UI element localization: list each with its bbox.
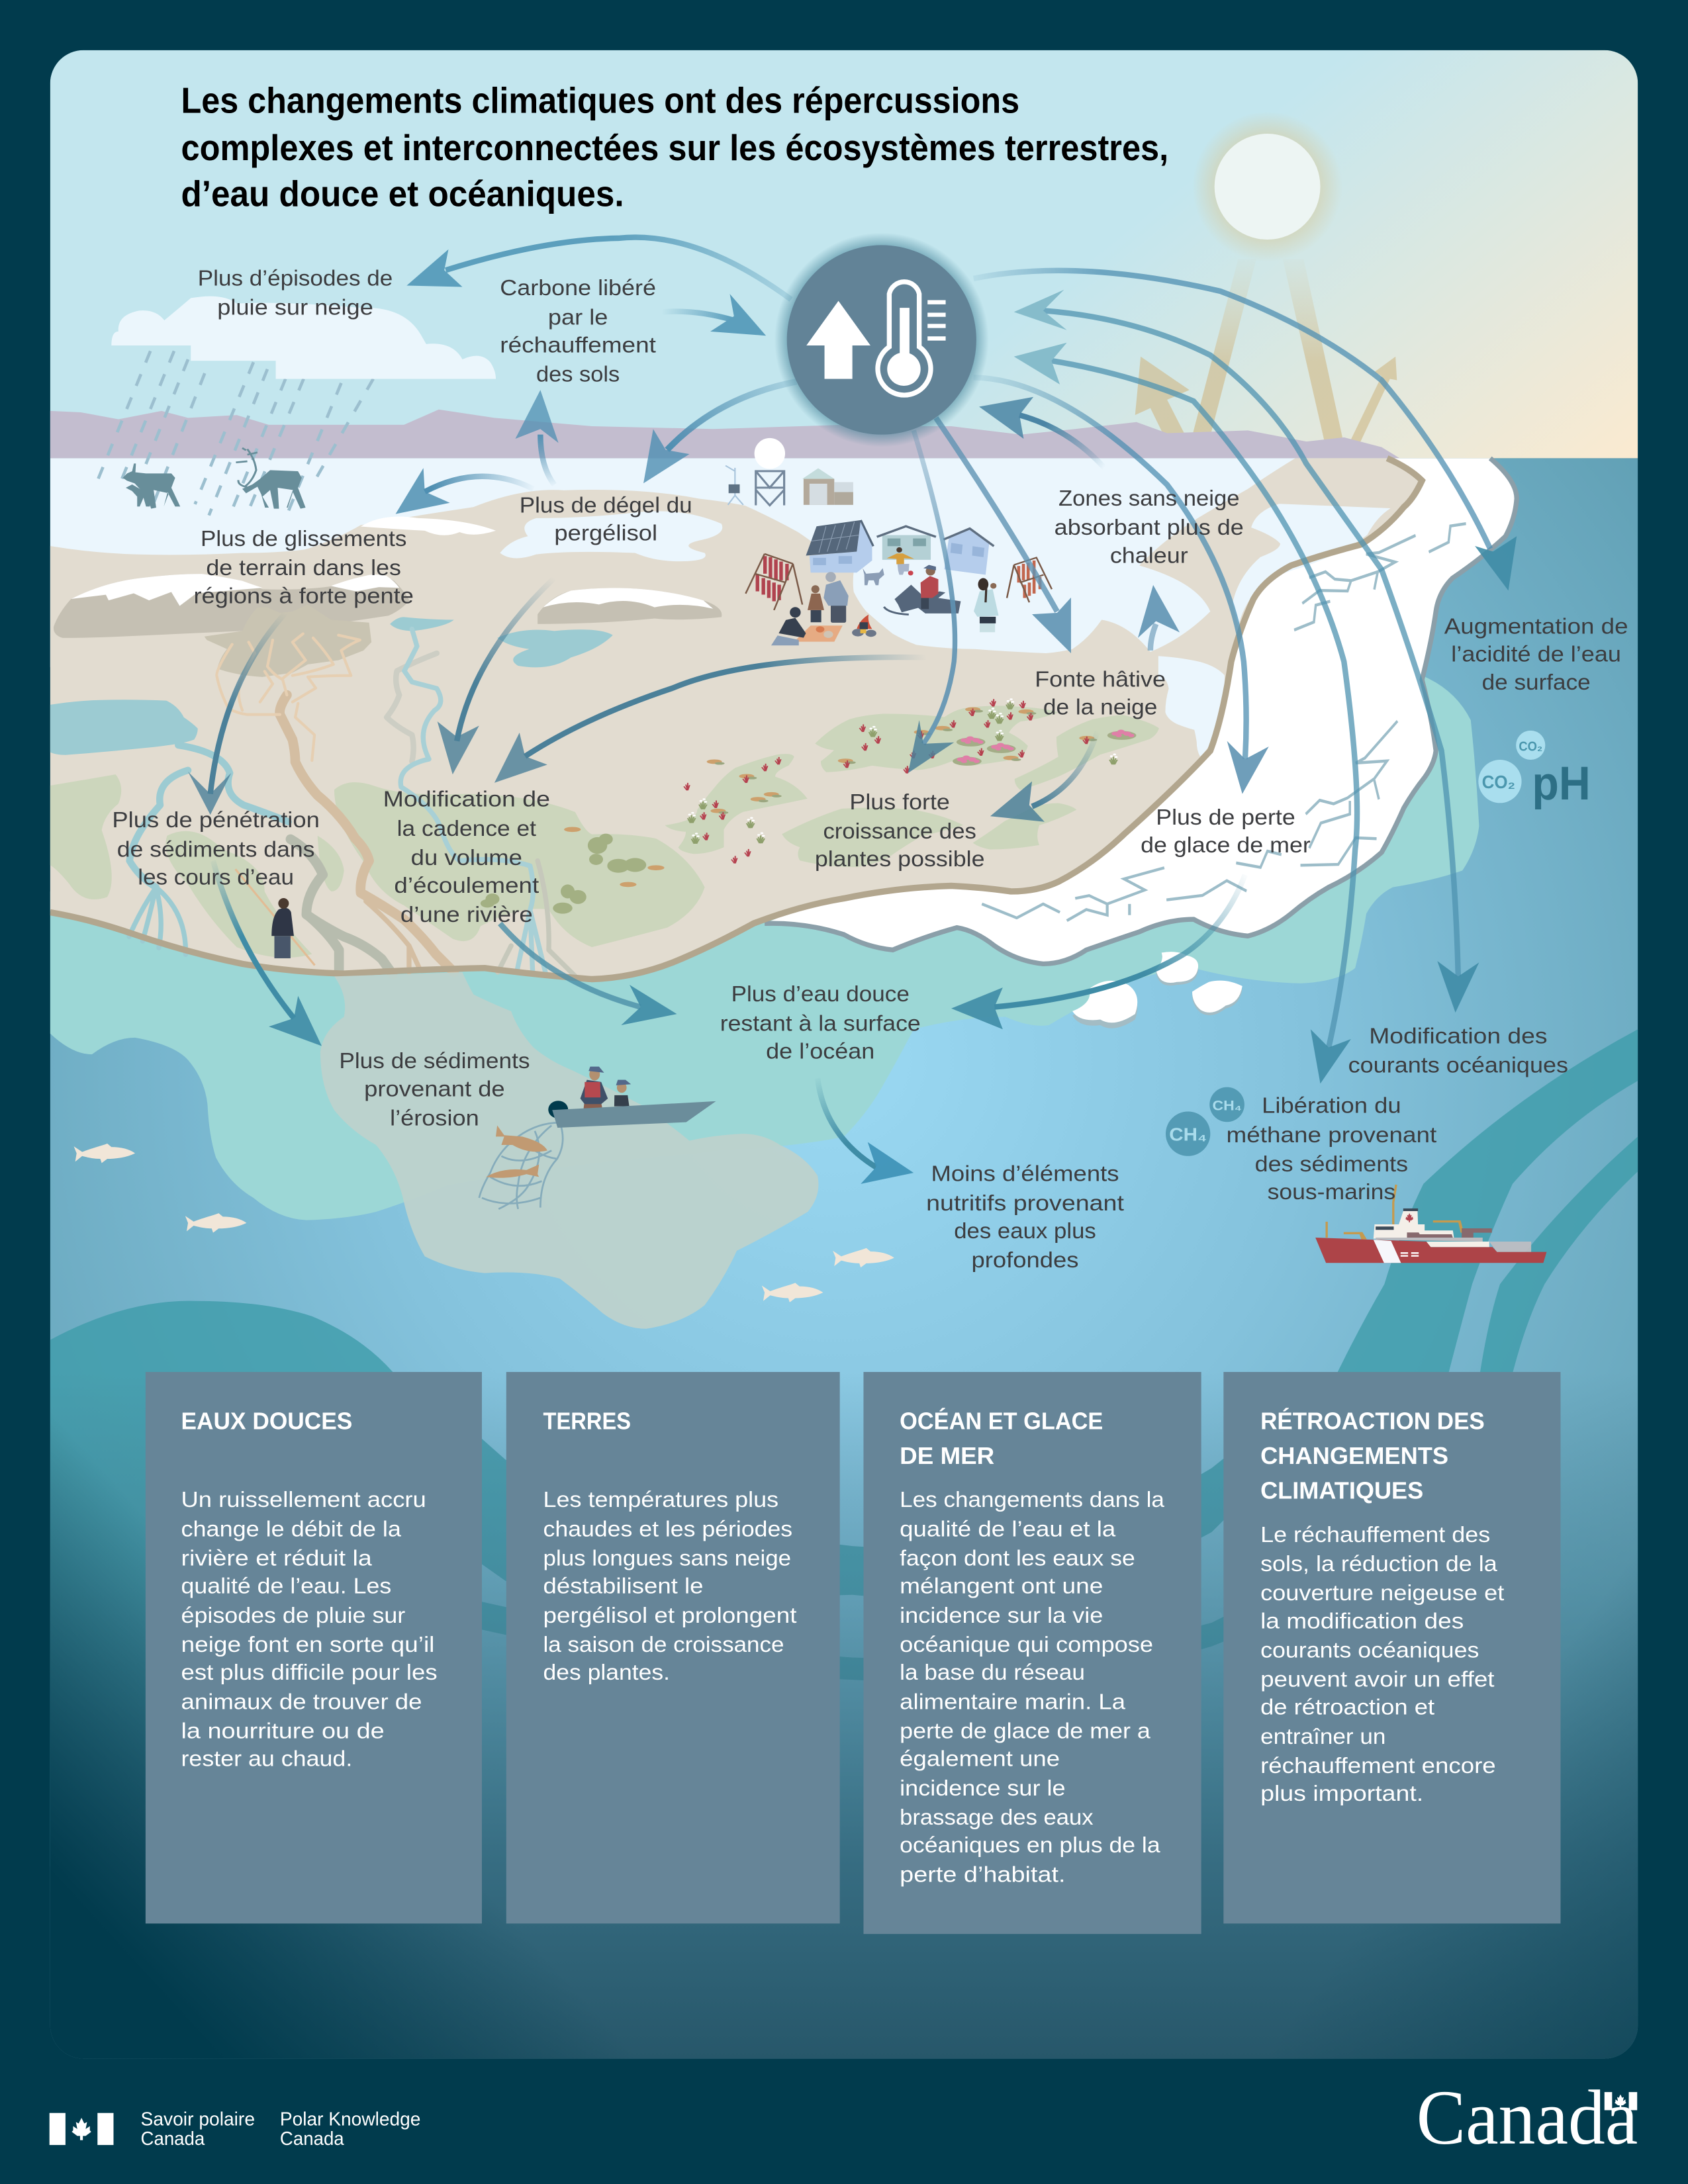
label: sediment penetration: de sédiments dans — [117, 837, 314, 862]
label: river flow: du volume — [411, 846, 522, 870]
body text — [1260, 1523, 1505, 1806]
label: snow-free zones — [1055, 486, 1244, 568]
label: river flow: d’écoulement — [394, 874, 539, 898]
label: river flow: d’une rivière — [400, 903, 533, 927]
body text: plus longues sans neige — [543, 1547, 791, 1571]
cracks near the south coast — [982, 868, 1164, 921]
child — [808, 585, 824, 622]
arrow: snowmelt to plant growth — [990, 731, 1098, 822]
sun — [1197, 116, 1337, 257]
title: d’eau douce et océaniques. — [181, 173, 624, 214]
up arrow — [806, 301, 870, 379]
label: snow-free zones: Zones sans neige — [1058, 486, 1240, 511]
body text: la saison de croissance — [543, 1633, 784, 1657]
label: river flow: Modification de — [383, 788, 550, 812]
freshwater lakes — [50, 617, 613, 755]
body text — [543, 1488, 797, 1685]
arrow: freshwater to fewer nutrients — [818, 1078, 914, 1184]
radar tower — [756, 471, 784, 506]
label: fresh water: Plus d’eau douce — [731, 982, 910, 1007]
icon: CO2 and pH: CO₂ — [1482, 772, 1515, 792]
arrow: warming to early snowmelt — [936, 418, 1071, 653]
body text: brassage des eaux — [900, 1805, 1094, 1830]
deep water fade — [50, 1372, 1638, 2062]
body text: Les températures plus — [543, 1488, 778, 1512]
body text: la base du réseau — [900, 1661, 1085, 1685]
label: nutrients: nutritifs provenant — [926, 1191, 1125, 1216]
arrow: river sediment to ocean — [213, 861, 322, 1046]
label: sediment penetration: Plus de pénétration — [112, 808, 320, 833]
arrow: permafrost to slumps — [396, 468, 534, 514]
snow patches east of the community — [1158, 504, 1391, 756]
arrow: snow-free zones to warming — [979, 397, 1104, 468]
landslide debris — [205, 604, 371, 677]
northern snow cap — [361, 517, 496, 535]
elder — [823, 572, 849, 623]
arrow: sea ice melt to freshwater — [951, 875, 1245, 1029]
body text: Le réchauffement des — [1260, 1523, 1490, 1547]
hull — [552, 1101, 716, 1128]
organisation name: Polar Knowledge — [280, 2109, 420, 2130]
body text: mélangent ont une — [900, 1574, 1103, 1599]
logo: Canada wordmark: Canada — [1417, 2075, 1638, 2161]
label: fresh water — [720, 982, 921, 1064]
body text: courants océaniques — [1260, 1638, 1479, 1662]
label: sea ice loss: de glace de mer — [1141, 833, 1311, 858]
body text: des plantes. — [543, 1661, 670, 1685]
hunter with harpoon — [236, 869, 314, 965]
label: sediment penetration: les cours d’eau — [138, 865, 294, 889]
body text: incidence sur le — [900, 1776, 1066, 1801]
body text: incidence sur la vie — [900, 1604, 1103, 1628]
label: carbon: Carbone libéré — [500, 276, 656, 300]
body text: également une — [900, 1747, 1060, 1772]
white deck band — [1427, 1242, 1489, 1247]
label: rain on snow: pluie sur neige — [217, 296, 373, 320]
label: methane: sous-marins — [1268, 1180, 1395, 1205]
land — [50, 458, 1422, 979]
label: rain on snow — [198, 266, 393, 320]
maple leaf — [1405, 1213, 1413, 1222]
label: snow-free zones: absorbant plus de — [1055, 516, 1244, 540]
label: landslides: Plus de glissements — [201, 527, 406, 551]
aft deck — [1489, 1242, 1531, 1252]
body text: alimentaire marin. La — [900, 1690, 1125, 1714]
hull — [1315, 1238, 1546, 1263]
label: rain on snow: Plus d’épisodes de — [198, 266, 393, 291]
body text: est plus difficile pour les — [181, 1661, 438, 1685]
body text: réchauffement encore — [1260, 1754, 1496, 1778]
label: erosion sediments: provenant de — [364, 1077, 505, 1101]
sea background — [50, 458, 1638, 2060]
body text: épisodes de pluie sur — [181, 1604, 405, 1628]
hull stripe — [1374, 1240, 1401, 1263]
body text: sols, la réduction de la — [1260, 1552, 1497, 1576]
rivers — [129, 629, 578, 979]
green house — [877, 526, 936, 560]
arrow: warming to plant growth — [908, 430, 955, 773]
heading: CLIMATIQUES — [1260, 1478, 1423, 1504]
cloud — [111, 296, 496, 379]
label: snow-free zones: chaleur — [1110, 543, 1188, 568]
arrow: slumps to sediment in rivers — [188, 613, 285, 815]
label: early snowmelt: de la neige — [1043, 696, 1157, 720]
snow cap — [331, 574, 399, 592]
body text: qualité de l’eau et la — [900, 1517, 1116, 1541]
heading — [1260, 1408, 1485, 1504]
label: plant growth: croissance des — [823, 819, 976, 844]
label: river flow: la cadence et — [397, 817, 537, 841]
label: nutrients — [926, 1162, 1125, 1273]
crane — [1433, 1220, 1464, 1233]
body text: Un ruissellement accru — [181, 1488, 426, 1512]
blue house — [943, 529, 994, 575]
body text: neige font en sorte qu’il — [181, 1633, 434, 1657]
arrow: carbon to warming — [661, 294, 766, 336]
dog — [863, 569, 884, 585]
snow plain — [50, 458, 1387, 667]
label: carbon — [500, 276, 657, 387]
body text: Les changements dans la — [900, 1488, 1164, 1512]
label: landslides: de terrain dans les — [206, 556, 401, 580]
body text: couverture neigeuse et — [1260, 1581, 1505, 1606]
label: fresh water: de l’océan — [766, 1039, 874, 1064]
icon: CH4: CH₄ — [1212, 1098, 1242, 1113]
body text: chaudes et les périodes — [543, 1517, 792, 1541]
thermometer — [878, 282, 931, 395]
body text — [900, 1488, 1164, 1887]
arrow: permafrost to river flow — [438, 578, 554, 774]
organisation name: Savoir polaire — [140, 2109, 255, 2130]
arrow: warming to permafrost — [643, 382, 796, 483]
sea ice — [765, 458, 1517, 964]
sun rays reflected off the land — [1135, 268, 1397, 458]
gray deck — [1376, 1238, 1483, 1242]
tundra vegetation patches — [50, 705, 1159, 958]
icon: thermometer badge — [774, 232, 989, 447]
radar dome — [755, 438, 785, 469]
cracks near the east coast — [1166, 523, 1466, 900]
skipper — [581, 1067, 608, 1109]
label: ocean currents — [1348, 1024, 1568, 1078]
icon: CO2 and pH: pH — [1532, 757, 1591, 810]
fishing net with fish — [479, 1122, 563, 1209]
body text: océanique qui compose — [900, 1633, 1153, 1657]
label: acidity: l’acidité de l’eau — [1451, 643, 1621, 667]
body text: déstabilisent le — [543, 1574, 703, 1599]
heading: OCÉAN ET GLACE — [900, 1408, 1103, 1434]
body text: la modification des — [1260, 1609, 1464, 1633]
label: erosion sediments: Plus de sédiments — [339, 1049, 530, 1073]
body text — [181, 1488, 438, 1772]
label: erosion sediments: l’érosion — [390, 1107, 479, 1131]
label: early snowmelt: Fonte hâtive — [1035, 668, 1166, 692]
rain and clouds — [97, 296, 496, 518]
label: sea ice loss: Plus de perte — [1156, 805, 1295, 830]
sediment plume — [320, 972, 818, 1329]
title — [181, 79, 1168, 214]
funnel top — [1403, 1208, 1418, 1211]
label: acidity: Augmentation de — [1444, 615, 1628, 639]
heading: CHANGEMENTS — [1260, 1443, 1448, 1469]
storage buildings — [802, 469, 853, 505]
body text: pergélisol et prolongent — [543, 1604, 797, 1628]
icon: CH4: CH₄ — [1169, 1124, 1207, 1145]
weather mast — [726, 466, 743, 505]
arrow: permafrost to carbon — [515, 390, 559, 484]
label: methane: méthane provenant — [1227, 1123, 1437, 1148]
label: permafrost: Plus de dégel du — [520, 493, 692, 518]
ice cracks — [982, 523, 1466, 921]
bottom-right dark corner — [50, 1372, 1638, 2062]
body text: la nourriture ou de — [181, 1719, 385, 1744]
arrow: warming to ocean acidity — [974, 271, 1517, 590]
right drying rack — [1007, 558, 1052, 602]
title: complexes et interconnectées sur les écosystèmes terrestres, — [181, 127, 1168, 168]
motor — [548, 1101, 568, 1118]
current waves behind the panels — [482, 1435, 1282, 1682]
hull marks — [1401, 1253, 1419, 1256]
ice floes — [1072, 952, 1243, 1028]
eastern tundra plants — [684, 698, 1136, 864]
deck equipment — [1407, 1232, 1453, 1238]
title: Les changements climatiques ont des répercussions — [181, 79, 1019, 120]
snowmobile and rider — [884, 565, 961, 615]
ocean current bands — [50, 1029, 1638, 1866]
label: permafrost: pergélisol — [554, 522, 657, 546]
label: early snowmelt — [1035, 668, 1166, 720]
label: fresh water: restant à la surface — [720, 1011, 921, 1036]
body text: entraîner un — [1260, 1725, 1385, 1749]
masts and cranes — [1327, 1185, 1396, 1238]
body text: animaux de trouver de — [181, 1690, 422, 1714]
snow cap — [543, 588, 713, 609]
body text: perte de glace de mer a — [900, 1719, 1150, 1744]
flag symbol — [50, 2113, 113, 2145]
bottom-left dark corner — [50, 1372, 1638, 2062]
arrow: methane release feedback — [1014, 343, 1357, 1083]
body text: océaniques en plus de la — [900, 1833, 1160, 1858]
body text: qualité de l’eau. Les — [181, 1574, 391, 1599]
arrow: warming to sea ice loss — [974, 377, 1269, 794]
label: nutrients: profondes — [972, 1248, 1079, 1273]
icon: CO2 and pH — [1478, 731, 1591, 810]
house with solar panels — [806, 520, 873, 572]
logo: Polar Knowledge Canada — [50, 2109, 420, 2150]
arrow: snowmelt to snow-free zones — [1138, 585, 1180, 651]
body text: perte d’habitat. — [900, 1862, 1066, 1887]
arrows — [188, 238, 1517, 1184]
label: ocean currents: courants océaniques — [1348, 1054, 1568, 1078]
body text: change le débit de la — [181, 1517, 401, 1541]
superstructure — [1374, 1211, 1454, 1239]
organisation name: Canada — [140, 2128, 205, 2150]
eastern vegetation patches — [665, 705, 1159, 867]
crane — [1344, 1232, 1367, 1240]
body text: peuvent avoir un effet — [1260, 1668, 1495, 1692]
label: nutrients: des eaux plus — [954, 1219, 1096, 1244]
arrow: snowmelt to river flow — [494, 657, 926, 783]
label: acidity: de surface — [1482, 670, 1591, 695]
coastline — [50, 458, 1422, 979]
window band — [1376, 1226, 1393, 1230]
snow patches on land — [500, 504, 1391, 756]
panel: terres — [506, 1372, 840, 1923]
seated man and fish mat — [771, 607, 843, 645]
heading — [900, 1408, 1103, 1469]
gray boulder hills with snow caps — [54, 517, 722, 677]
heading: TERRES — [543, 1408, 631, 1434]
arrow: ocean currents feedback — [1014, 290, 1479, 1013]
heading: RÉTROACTION DES — [1260, 1408, 1485, 1434]
community scene — [726, 438, 1052, 645]
western tundra plants — [481, 827, 665, 914]
body text: rivière et réduit la — [181, 1547, 372, 1571]
label: ocean currents: Modification des — [1369, 1024, 1548, 1048]
fishing boat and crew — [548, 1067, 716, 1128]
icon: CH4 — [1166, 1087, 1244, 1156]
label: acidity — [1444, 615, 1628, 695]
label: carbon: par le — [548, 305, 608, 330]
sea ice edge — [765, 458, 1517, 964]
child playing — [887, 547, 914, 576]
eastern hill — [538, 588, 722, 624]
heading: DE MER — [900, 1443, 994, 1469]
organisation name — [140, 2109, 420, 2150]
label: sea ice loss — [1141, 805, 1311, 858]
label: plant growth: plantes possible — [815, 847, 984, 872]
shallow coastal water — [50, 676, 1479, 1220]
icon: caribou — [122, 448, 306, 509]
fish school — [74, 1144, 894, 1302]
body text: rester au chaud. — [181, 1747, 352, 1772]
icon: CO2 and pH: CO₂ — [1519, 739, 1542, 754]
label: plant growth: Plus forte — [849, 790, 950, 815]
panel: eaux douces — [146, 1372, 482, 1923]
label: carbon: des sols — [536, 363, 620, 387]
left drying rack — [745, 554, 802, 610]
label: permafrost — [520, 493, 692, 546]
rain streaks — [97, 351, 373, 518]
label: landslides: régions à forte pente — [193, 584, 414, 608]
body text: façon dont les eaux se — [900, 1547, 1135, 1571]
label: river flow — [383, 788, 550, 927]
woman carrying child — [974, 578, 999, 632]
arrow: river flow to freshwater — [500, 923, 677, 1025]
body text: plus important. — [1260, 1782, 1423, 1806]
organisation name: Canada — [280, 2128, 344, 2150]
label: landslides — [193, 527, 414, 608]
label: carbon: réchauffement — [500, 333, 657, 357]
label: erosion sediments — [339, 1049, 530, 1131]
label: sediment penetration — [112, 808, 320, 889]
heading: EAUX DOUCES — [181, 1408, 352, 1434]
label: plant growth — [815, 790, 985, 872]
arrow: warming to rain on snow — [406, 238, 791, 299]
panel: retroaction — [1223, 1372, 1560, 1923]
sky — [50, 50, 1638, 458]
body text: de rétroaction et — [1260, 1696, 1435, 1720]
label: methane — [1227, 1094, 1437, 1205]
campfire — [852, 615, 876, 637]
label: nutrients: Moins d’éléments — [931, 1162, 1119, 1187]
deck equipment — [1462, 1228, 1492, 1238]
label: methane: des sédiments — [1255, 1152, 1408, 1177]
distant mountains — [50, 410, 1399, 458]
panel: ocean et glace de mer — [863, 1372, 1201, 1934]
label: methane: Libération du — [1262, 1094, 1401, 1118]
icebreaker ship — [1315, 1185, 1546, 1263]
snow cap — [71, 574, 263, 606]
child passenger — [614, 1080, 631, 1107]
